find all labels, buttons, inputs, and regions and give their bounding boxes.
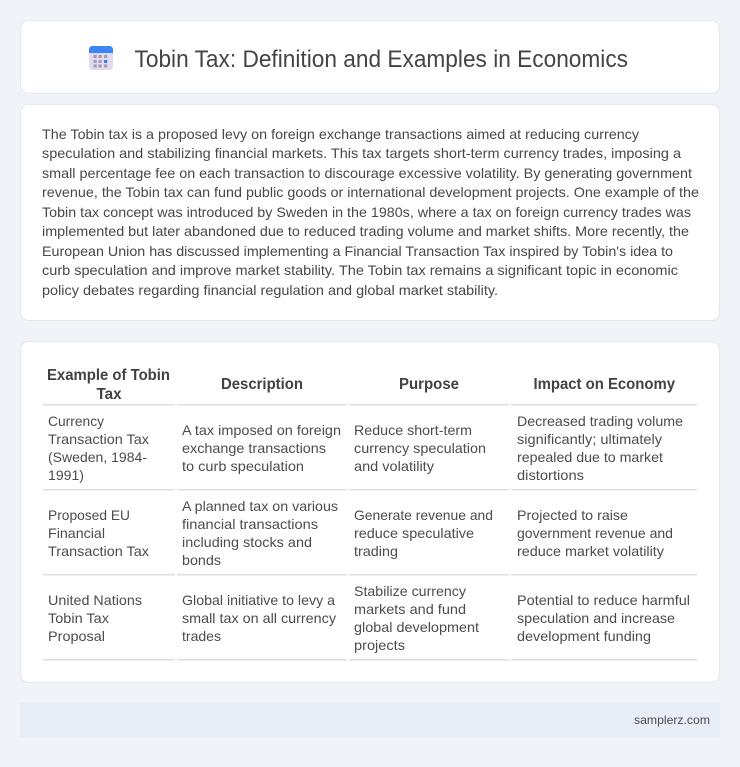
table row: United Nations Tobin tax proposal: Stabilize currency (354, 583, 466, 599)
table row: Sweden currency transaction tax: Decreased trading volume (517, 413, 683, 429)
table row: proposed EU financial transaction tax: Financial (48, 525, 105, 541)
table row: United Nations Tobin tax proposal: global development (354, 619, 479, 635)
text block: intro paragraph: curb speculation and improve market stability. The Tobin tax remains a significant topic in economic (42, 262, 678, 278)
table row: United Nations Tobin tax proposal: development funding (517, 628, 651, 644)
table row: Sweden currency transaction tax: A tax imposed on foreign (182, 422, 341, 438)
text block: intro paragraph: implemented but later abandoned due to reduced trading volume and market shifts. More recently, the (42, 223, 689, 239)
table row: proposed EU financial transaction tax: bonds (182, 552, 221, 568)
table row: proposed EU financial transaction tax: Transaction Tax (48, 543, 149, 559)
text block: intro paragraph: European Union has discussed implementing a Financial Transaction Tax inspired by Tobin's idea to (42, 243, 673, 259)
title: Tobin Tax: Definition and Examples in Economics (134, 46, 628, 73)
footer bar (20, 703, 720, 737)
table row: United Nations Tobin tax proposal: Global initiative to levy a (182, 592, 335, 608)
panel: table card (20, 342, 720, 682)
table row: United Nations Tobin tax proposal (43, 583, 697, 660)
table row: United Nations Tobin tax proposal: markets and fund (354, 601, 466, 617)
text block: intro paragraph: revenue, the Tobin tax can fund public goods or international development projects. One example of the (42, 184, 699, 200)
column heading: example: Example of Tobin (47, 367, 170, 384)
text block: intro paragraph: Tobin tax concept was introduced by Sweden in the 1980s, where a tax on foreign currency trades was (42, 204, 691, 220)
table row: United Nations Tobin tax proposal: trades (182, 628, 221, 644)
text block: intro paragraph: policy debates regarding financial regulation and global market stability. (42, 282, 498, 298)
table row: proposed EU financial transaction tax: reduce market volatility (517, 543, 664, 559)
table header row (43, 367, 697, 406)
table row: Sweden currency transaction tax: Reduce short-term (354, 422, 472, 438)
table row: proposed EU financial transaction tax: trading (354, 543, 398, 559)
icon: calendar (89, 46, 113, 70)
table row: United Nations Tobin tax proposal: Potential to reduce harmful (517, 592, 690, 608)
table row: Sweden currency transaction tax: Transaction Tax (48, 431, 149, 447)
table row: United Nations Tobin tax proposal: small tax on all currency (182, 610, 336, 626)
table row: Sweden currency transaction tax: significantly; ultimately (517, 431, 662, 447)
panel: intro text card (20, 104, 720, 320)
text block: intro paragraph: speculation and stabilizing financial markets. This tax targets short-term currency trades, imposing a (42, 145, 681, 161)
table row: Sweden currency transaction tax: distortions (517, 467, 584, 483)
table row: Sweden currency transaction tax (43, 413, 697, 490)
column heading: description: Description (221, 376, 303, 393)
table row: proposed EU financial transaction tax (43, 498, 697, 576)
table row: proposed EU financial transaction tax: government revenue and (517, 525, 673, 541)
table row: United Nations Tobin tax proposal: projects (354, 637, 405, 653)
column heading: impact on economy: Impact on Economy (534, 376, 675, 393)
panel: header card (20, 20, 720, 94)
table row: Sweden currency transaction tax: Currency (48, 413, 104, 429)
table row: proposed EU financial transaction tax: financial transactions (182, 516, 318, 532)
table row: United Nations Tobin tax proposal: speculation and increase (517, 610, 675, 626)
table row: Sweden currency transaction tax: to curb speculation (182, 458, 304, 474)
table row: Sweden currency transaction tax: repealed due to market (517, 449, 663, 465)
column heading: example: Tax (96, 386, 122, 403)
column heading: example (47, 367, 170, 403)
table row: proposed EU financial transaction tax: Projected to raise (517, 507, 628, 523)
table row: United Nations Tobin tax proposal: United Nations (48, 592, 142, 608)
table row: Sweden currency transaction tax: (Sweden, 1984- (48, 449, 147, 465)
footer credit: samplerz.com (634, 713, 710, 727)
table row: proposed EU financial transaction tax: A planned tax on various (182, 498, 338, 514)
table row: Sweden currency transaction tax: 1991) (48, 467, 84, 483)
text block: intro paragraph: The Tobin tax is a proposed levy on foreign exchange transactions aimed at reducing currency (42, 126, 639, 142)
column heading: purpose: Purpose (399, 376, 459, 393)
table row: proposed EU financial transaction tax: Generate revenue and (354, 507, 493, 523)
table row: United Nations Tobin tax proposal: Proposal (48, 628, 105, 644)
table row: Sweden currency transaction tax: currency speculation (354, 440, 486, 456)
table row: United Nations Tobin tax proposal: Tobin Tax (48, 610, 109, 626)
text block: intro paragraph: small percentage fee on each transaction to discourage excessive volatility. By generating government (42, 165, 692, 181)
table row: proposed EU financial transaction tax: Proposed EU (48, 507, 130, 523)
table row: Sweden currency transaction tax: exchange transactions (182, 440, 326, 456)
text block: intro paragraph (42, 126, 699, 298)
table row: proposed EU financial transaction tax: reduce speculative (354, 525, 474, 541)
table row: proposed EU financial transaction tax: including stocks and (182, 534, 312, 550)
table row: Sweden currency transaction tax: and volatility (354, 458, 434, 474)
